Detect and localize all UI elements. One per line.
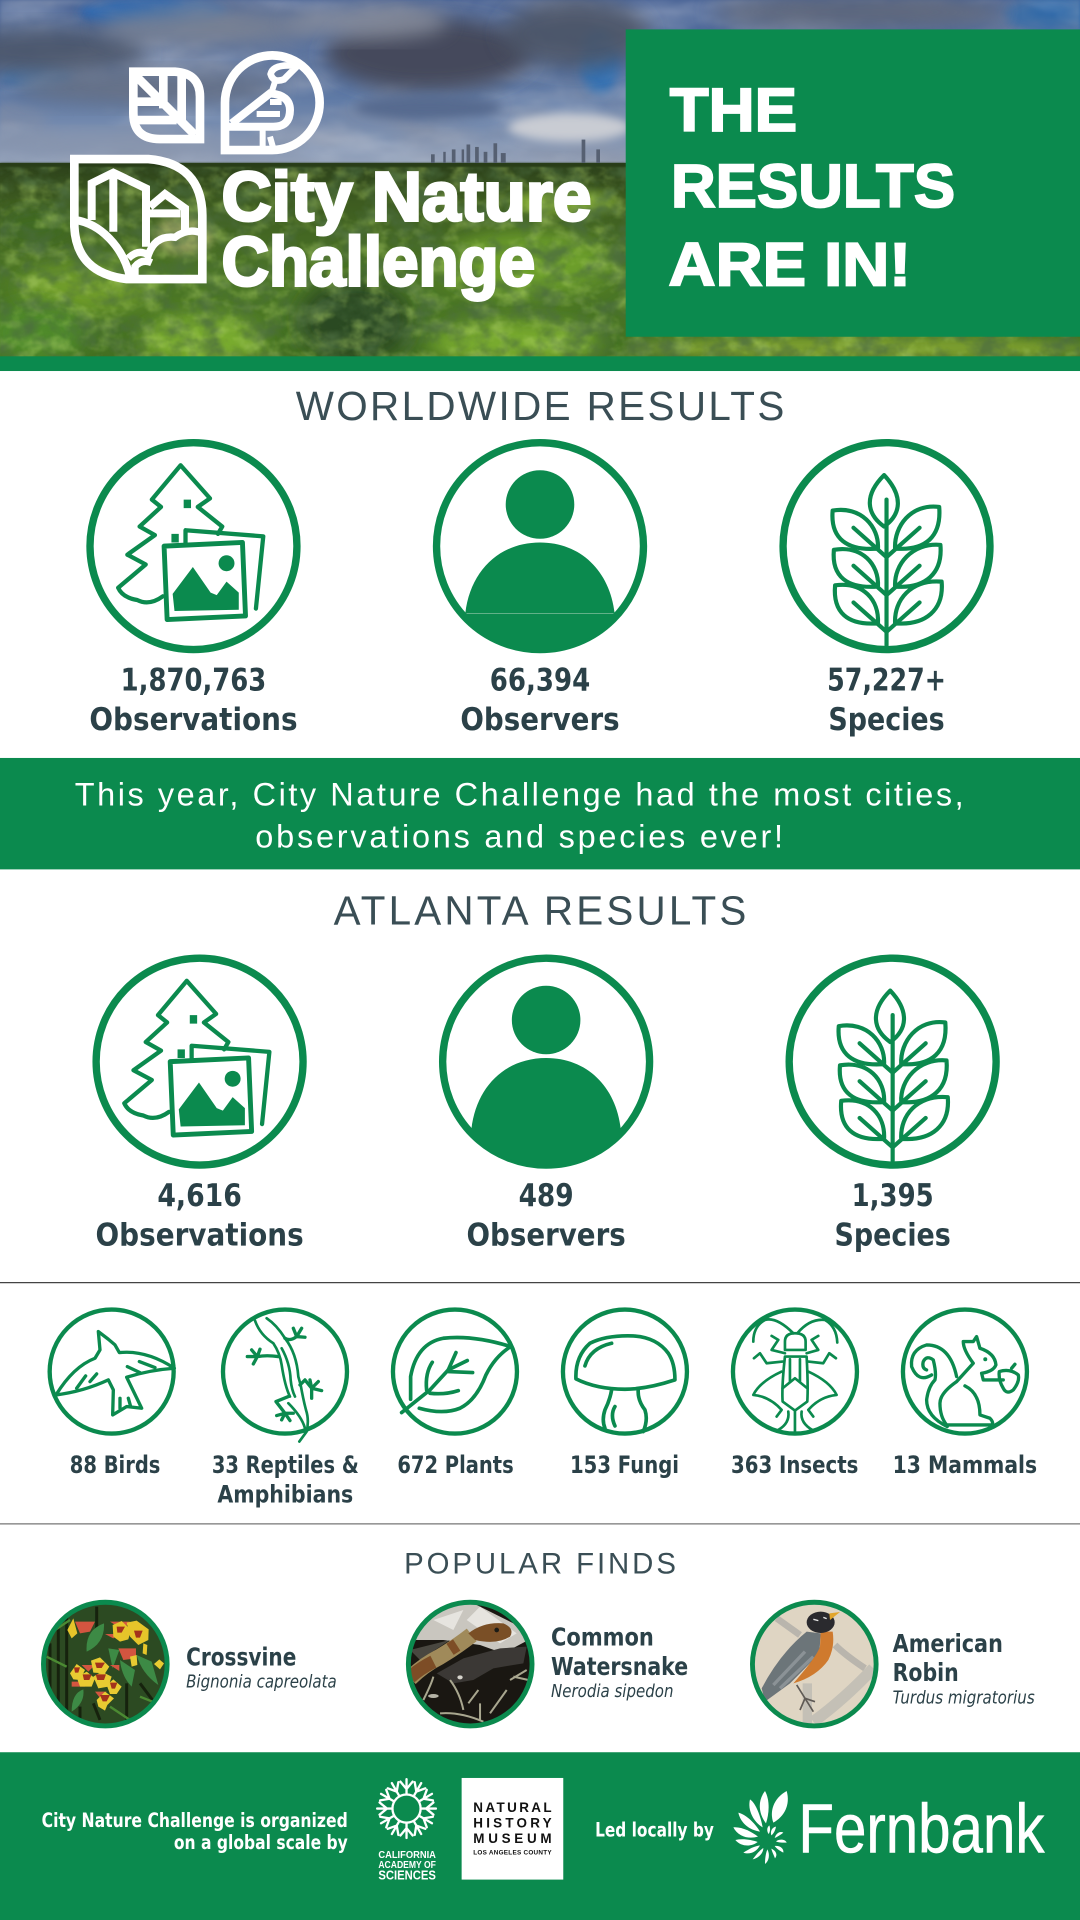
stat: atlanta species (789, 958, 996, 1253)
label: 33 reptiles and amphibians (212, 1451, 359, 1508)
label: 672 plants: 672 Plants (397, 1451, 514, 1479)
value: 57,227+ species (827, 663, 946, 738)
icon: lizard (223, 1310, 347, 1442)
photo: american robin (751, 1600, 878, 1728)
footer text: organizers: City Nature Challenge is organized (42, 1809, 348, 1832)
value: 66,394 observers: 66,394 (490, 663, 590, 699)
value: 1,395 species: 1,395 (852, 1178, 934, 1214)
hero green band (0, 356, 1080, 371)
icon: bird (50, 1310, 174, 1434)
logo: natural history museum (462, 1778, 563, 1880)
logo wordmark (222, 157, 591, 300)
text: american robin (893, 1629, 1035, 1708)
text: american robin: American (893, 1629, 1003, 1658)
title panel: the results are in: RESULTS (671, 152, 955, 220)
icon: plant (789, 958, 996, 1165)
value: 1,870,763 observations: Observations (89, 702, 298, 738)
category: plants (393, 1310, 517, 1479)
logo icons (74, 55, 320, 279)
value: 4,616 observations: 4,616 (157, 1178, 242, 1214)
value: 489 observers: Observers (467, 1217, 626, 1253)
text: common watersnake: Nerodia sipedon (551, 1682, 673, 1702)
category: reptiles and amphibians (212, 1310, 359, 1508)
value: 4,616 observations (96, 1178, 304, 1253)
logo: california academy of sciences (377, 1779, 436, 1883)
value: 4,616 observations: Observations (96, 1217, 304, 1253)
find: crossvine (42, 1600, 337, 1728)
text: common watersnake: Watersnake (551, 1652, 688, 1681)
label: 88 birds: 88 Birds (70, 1451, 160, 1479)
photo: watersnake (407, 1600, 534, 1728)
logo wordmark: City Nature (222, 157, 591, 235)
text: crossvine (186, 1642, 337, 1692)
stat: atlanta observations (96, 958, 304, 1253)
footer text: led locally by: Led locally by (595, 1819, 714, 1842)
text: american robin: Turdus migratorius (893, 1688, 1035, 1708)
logo: california academy of sciences: ACADEMY OF (378, 1860, 436, 1871)
find: american robin (751, 1600, 1035, 1728)
banner: most cities ever: observations and species ever! (255, 818, 783, 854)
icon: person (443, 958, 650, 1171)
value: 1,870,763 observations: 1,870,763 (121, 663, 266, 699)
logo: natural history museum: MUSEUM (473, 1831, 552, 1846)
heading: worldwide results: WORLDWIDE RESULTS (296, 383, 784, 429)
text: common watersnake (551, 1623, 688, 1702)
stat: worldwide species (783, 443, 990, 738)
logo: natural history museum: HISTORY (473, 1816, 552, 1831)
label: 33 reptiles and amphibians: 33 Reptiles & (212, 1451, 359, 1479)
label: 13 mammals: 13 Mammals (893, 1451, 1037, 1479)
title panel: the results are in (626, 29, 1080, 337)
label: 363 insects: 363 Insects (731, 1451, 858, 1479)
value: 1,395 species (834, 1178, 951, 1253)
footer text: organizers (42, 1809, 348, 1854)
value: 489 observers (467, 1178, 626, 1253)
value: 1,395 species: Species (834, 1217, 951, 1253)
label: 33 reptiles and amphibians: Amphibians (217, 1480, 353, 1508)
stat: worldwide observations (89, 443, 298, 738)
icon: mushroom (563, 1310, 687, 1434)
icon: tree and photos (90, 443, 297, 650)
category: fungi (563, 1310, 687, 1479)
value: 57,227+ species: Species (828, 702, 945, 738)
icon: person (437, 443, 643, 655)
value: 489 observers: 489 (519, 1178, 574, 1214)
logo: natural history museum: LOS ANGELES COUNTY (473, 1849, 552, 1856)
photo: crossvine flowers (42, 1600, 169, 1728)
title panel: the results are in: THE (670, 76, 797, 144)
stat: atlanta observers (443, 958, 650, 1253)
label: 153 fungi: 153 Fungi (570, 1451, 679, 1479)
logo: california academy of sciences: CALIFORNIA (378, 1850, 436, 1861)
icon: squirrel (903, 1310, 1027, 1434)
footer text: organizers: on a global scale by (174, 1831, 348, 1854)
value: 1,870,763 observations (89, 663, 298, 738)
banner: most cities ever: This year, City Nature Challenge had the most cities, (75, 777, 964, 813)
value: 66,394 observers: Observers (460, 702, 620, 738)
banner: most cities ever (0, 758, 1080, 869)
title panel: the results are in: ARE IN! (669, 230, 911, 298)
hero: skyline photo background (0, 0, 1080, 367)
stat: worldwide observers (437, 443, 643, 738)
text: american robin: Robin (893, 1658, 959, 1687)
logo wordmark: Challenge (222, 222, 535, 300)
icon: leaf (393, 1310, 517, 1434)
find: common watersnake (407, 1600, 688, 1728)
text: crossvine: Crossvine (186, 1642, 296, 1671)
logo: City Nature Challenge (74, 55, 591, 300)
heading: popular finds: POPULAR FINDS (404, 1547, 676, 1580)
logo: natural history museum: NATURAL (473, 1800, 552, 1815)
heading: atlanta results: ATLANTA RESULTS (334, 887, 746, 933)
category: birds (50, 1310, 174, 1479)
logo: california academy of sciences: SCIENCES (378, 1868, 436, 1883)
value: 66,394 observers (460, 663, 620, 738)
value: 57,227+ species: 57,227+ (827, 663, 946, 699)
footer panel (0, 1752, 1080, 1920)
category: mammals (893, 1310, 1037, 1479)
text: crossvine: Bignonia capreolata (186, 1672, 337, 1692)
icon: plant (783, 443, 990, 650)
text: common watersnake: Common (551, 1623, 654, 1652)
icon: beetle (733, 1310, 857, 1434)
icon: tree and photos (96, 958, 303, 1165)
category: insects (731, 1310, 858, 1479)
